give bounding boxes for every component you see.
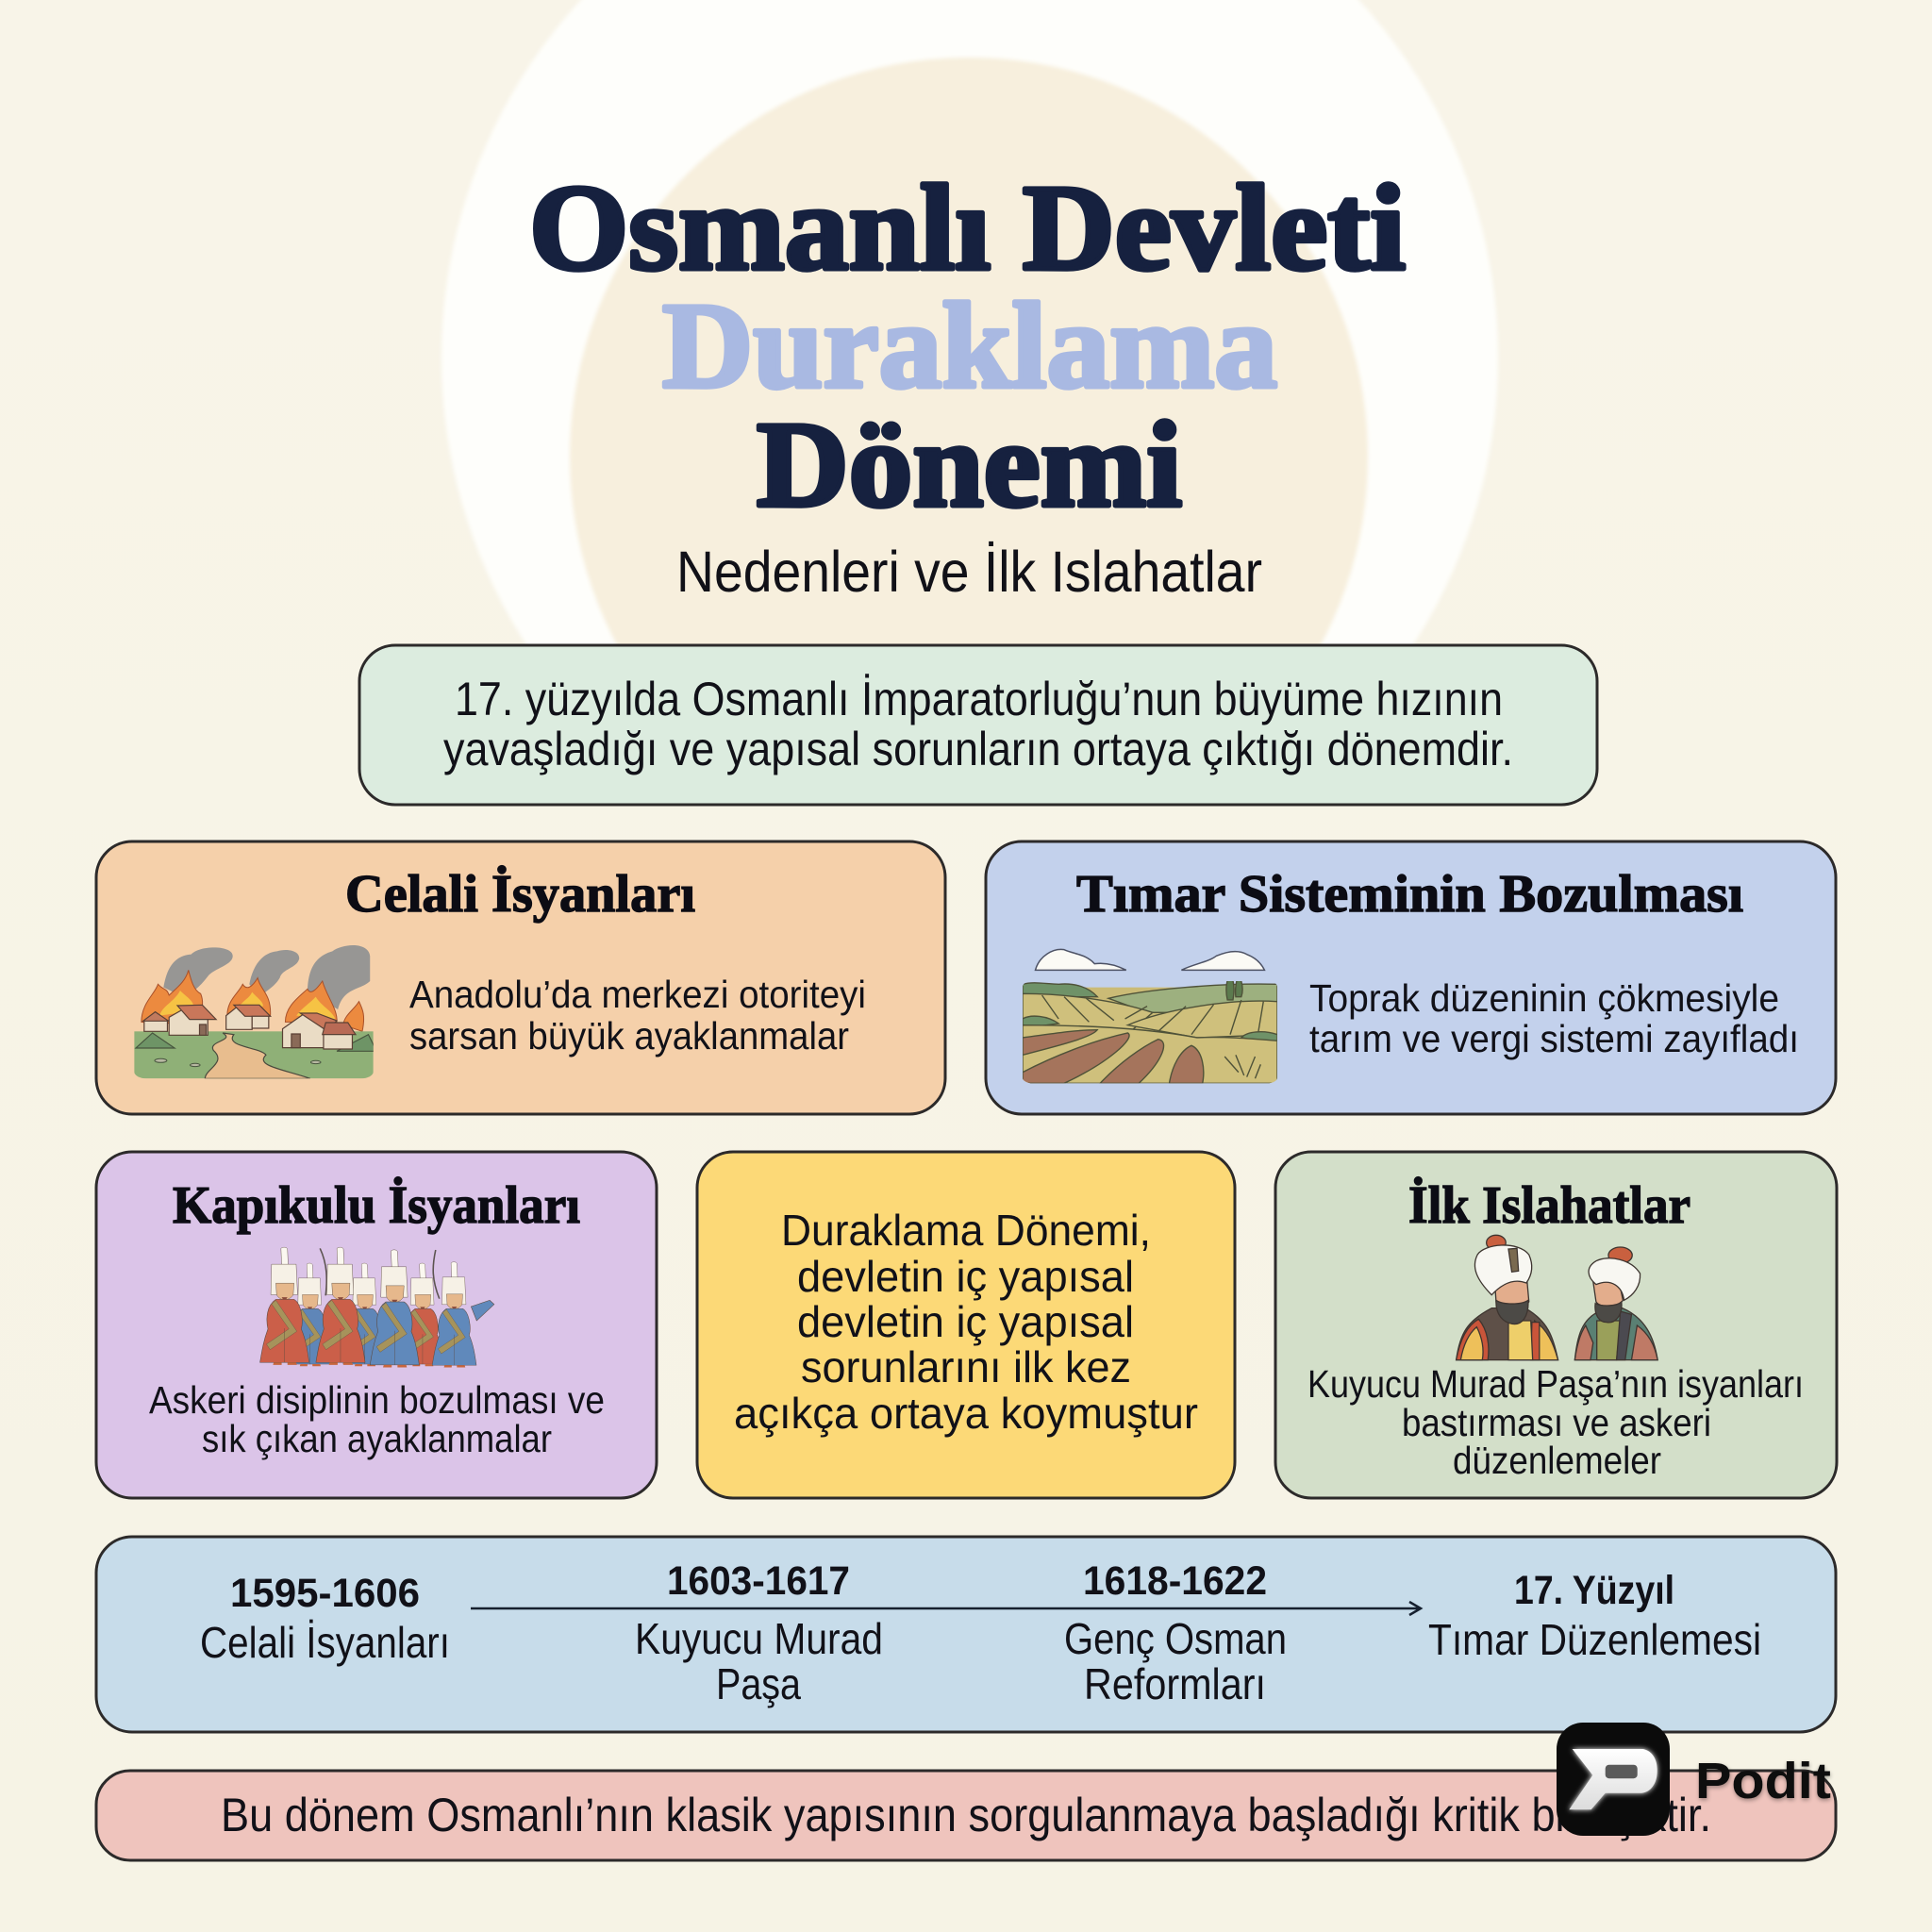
panel: intro: yavaşladığı ve yapısal sorunların ortaya çıktığı dönemdir. <box>443 723 1513 775</box>
description: düzenlemeler <box>1453 1439 1661 1482</box>
timeline item: 1603-1617: 1603-1617 <box>667 1558 850 1604</box>
description: Askeri disiplinin bozulması ve <box>149 1378 605 1422</box>
description: sarsan büyük ayaklanmalar <box>409 1014 849 1058</box>
description: bastırması ve askeri <box>1402 1401 1711 1444</box>
heading: Tımar Sisteminin Bozulması: Tımar Sisteminin Bozulması <box>1076 865 1743 924</box>
subtitle: Nedenleri ve İlk Islahatlar <box>676 540 1262 604</box>
title: Dönemi <box>757 397 1182 533</box>
panel: conclusion: Bu dönem Osmanlı’nın klasik yapısının sorgulanmaya başladığı kritik bir eşiktir. <box>221 1789 1711 1841</box>
wordmark: Podit: Podit <box>1696 1755 1831 1811</box>
panel: timeline <box>96 1537 1836 1732</box>
panel: intro <box>359 645 1597 805</box>
panel: Tımar Sisteminin Bozulması <box>986 841 1836 1114</box>
description <box>1307 1362 1804 1482</box>
heading: Celali İsyanları: Celali İsyanları <box>345 865 695 924</box>
timeline item: 1618-1622: Reformları <box>1084 1659 1266 1708</box>
timeline item: 1603-1617: Kuyucu Murad <box>635 1614 883 1663</box>
icon: Podit P mark <box>1557 1723 1670 1836</box>
timeline item: 17. Yüzyıl <box>1428 1568 1761 1664</box>
logo: Podit <box>1557 1723 1831 1836</box>
timeline item: 1618-1622: 1618-1622 <box>1083 1558 1267 1604</box>
icon: janissaries <box>260 1247 494 1368</box>
timeline item: 17. Yüzyıl: 17. Yüzyıl <box>1514 1568 1674 1613</box>
icon: burning village <box>134 945 376 1078</box>
panel: intro: 17. yüzyılda Osmanlı İmparatorluğu’nun büyüme hızının <box>455 673 1503 725</box>
title: Duraklama <box>662 278 1277 414</box>
description: Kuyucu Murad Paşa’nın isyanları <box>1307 1362 1804 1406</box>
timeline item: 17. Yüzyıl: Tımar Düzenlemesi <box>1428 1615 1761 1664</box>
panel: central statement: devletin iç yapısal <box>797 1297 1134 1346</box>
icon: farmland <box>1023 949 1277 1083</box>
panel: central statement: açıkça ortaya koymuştur <box>734 1389 1198 1438</box>
panel: Celali İsyanları <box>96 841 945 1114</box>
wordmark: Podit: Podit <box>1695 1753 1831 1809</box>
timeline item: 1603-1617: Paşa <box>716 1659 801 1708</box>
timeline item: 1618-1622: Genç Osman <box>1064 1614 1287 1663</box>
heading: Kapıkulu İsyanları: Kapıkulu İsyanları <box>173 1176 580 1235</box>
panel: central statement: sorunlarını ilk kez <box>801 1342 1131 1391</box>
panel: central statement <box>697 1152 1235 1498</box>
timeline item: 1595-1606 <box>200 1571 450 1667</box>
timeline item: 1595-1606: Celali İsyanları <box>200 1618 450 1667</box>
title: Osmanlı Devleti <box>529 160 1406 296</box>
timeline item: 1603-1617 <box>635 1558 883 1708</box>
description: Anadolu’da merkezi otoriteyi <box>409 973 866 1016</box>
description <box>1309 976 1799 1060</box>
panel: İlk Islahatlar <box>1275 1152 1837 1498</box>
title <box>529 160 1406 533</box>
description <box>409 973 866 1058</box>
description <box>149 1378 605 1460</box>
description: tarım ve vergi sistemi zayıfladı <box>1309 1017 1799 1060</box>
description: Toprak düzeninin çökmesiyle <box>1309 976 1779 1020</box>
timeline item: 1618-1622 <box>1064 1558 1287 1708</box>
panel: Kapıkulu İsyanları <box>96 1152 657 1498</box>
timeline item: 1595-1606: 1595-1606 <box>230 1571 420 1616</box>
panel: central statement: devletin iç yapısal <box>797 1252 1134 1301</box>
arrow <box>471 1602 1421 1615</box>
panel: central statement: Duraklama Dönemi, <box>781 1206 1151 1255</box>
icon: two pashas <box>1457 1235 1657 1360</box>
background circles <box>441 0 1498 643</box>
heading: İlk Islahatlar: İlk Islahatlar <box>1408 1176 1690 1235</box>
panel: conclusion <box>96 1771 1836 1860</box>
description: sık çıkan ayaklanmalar <box>202 1417 552 1460</box>
